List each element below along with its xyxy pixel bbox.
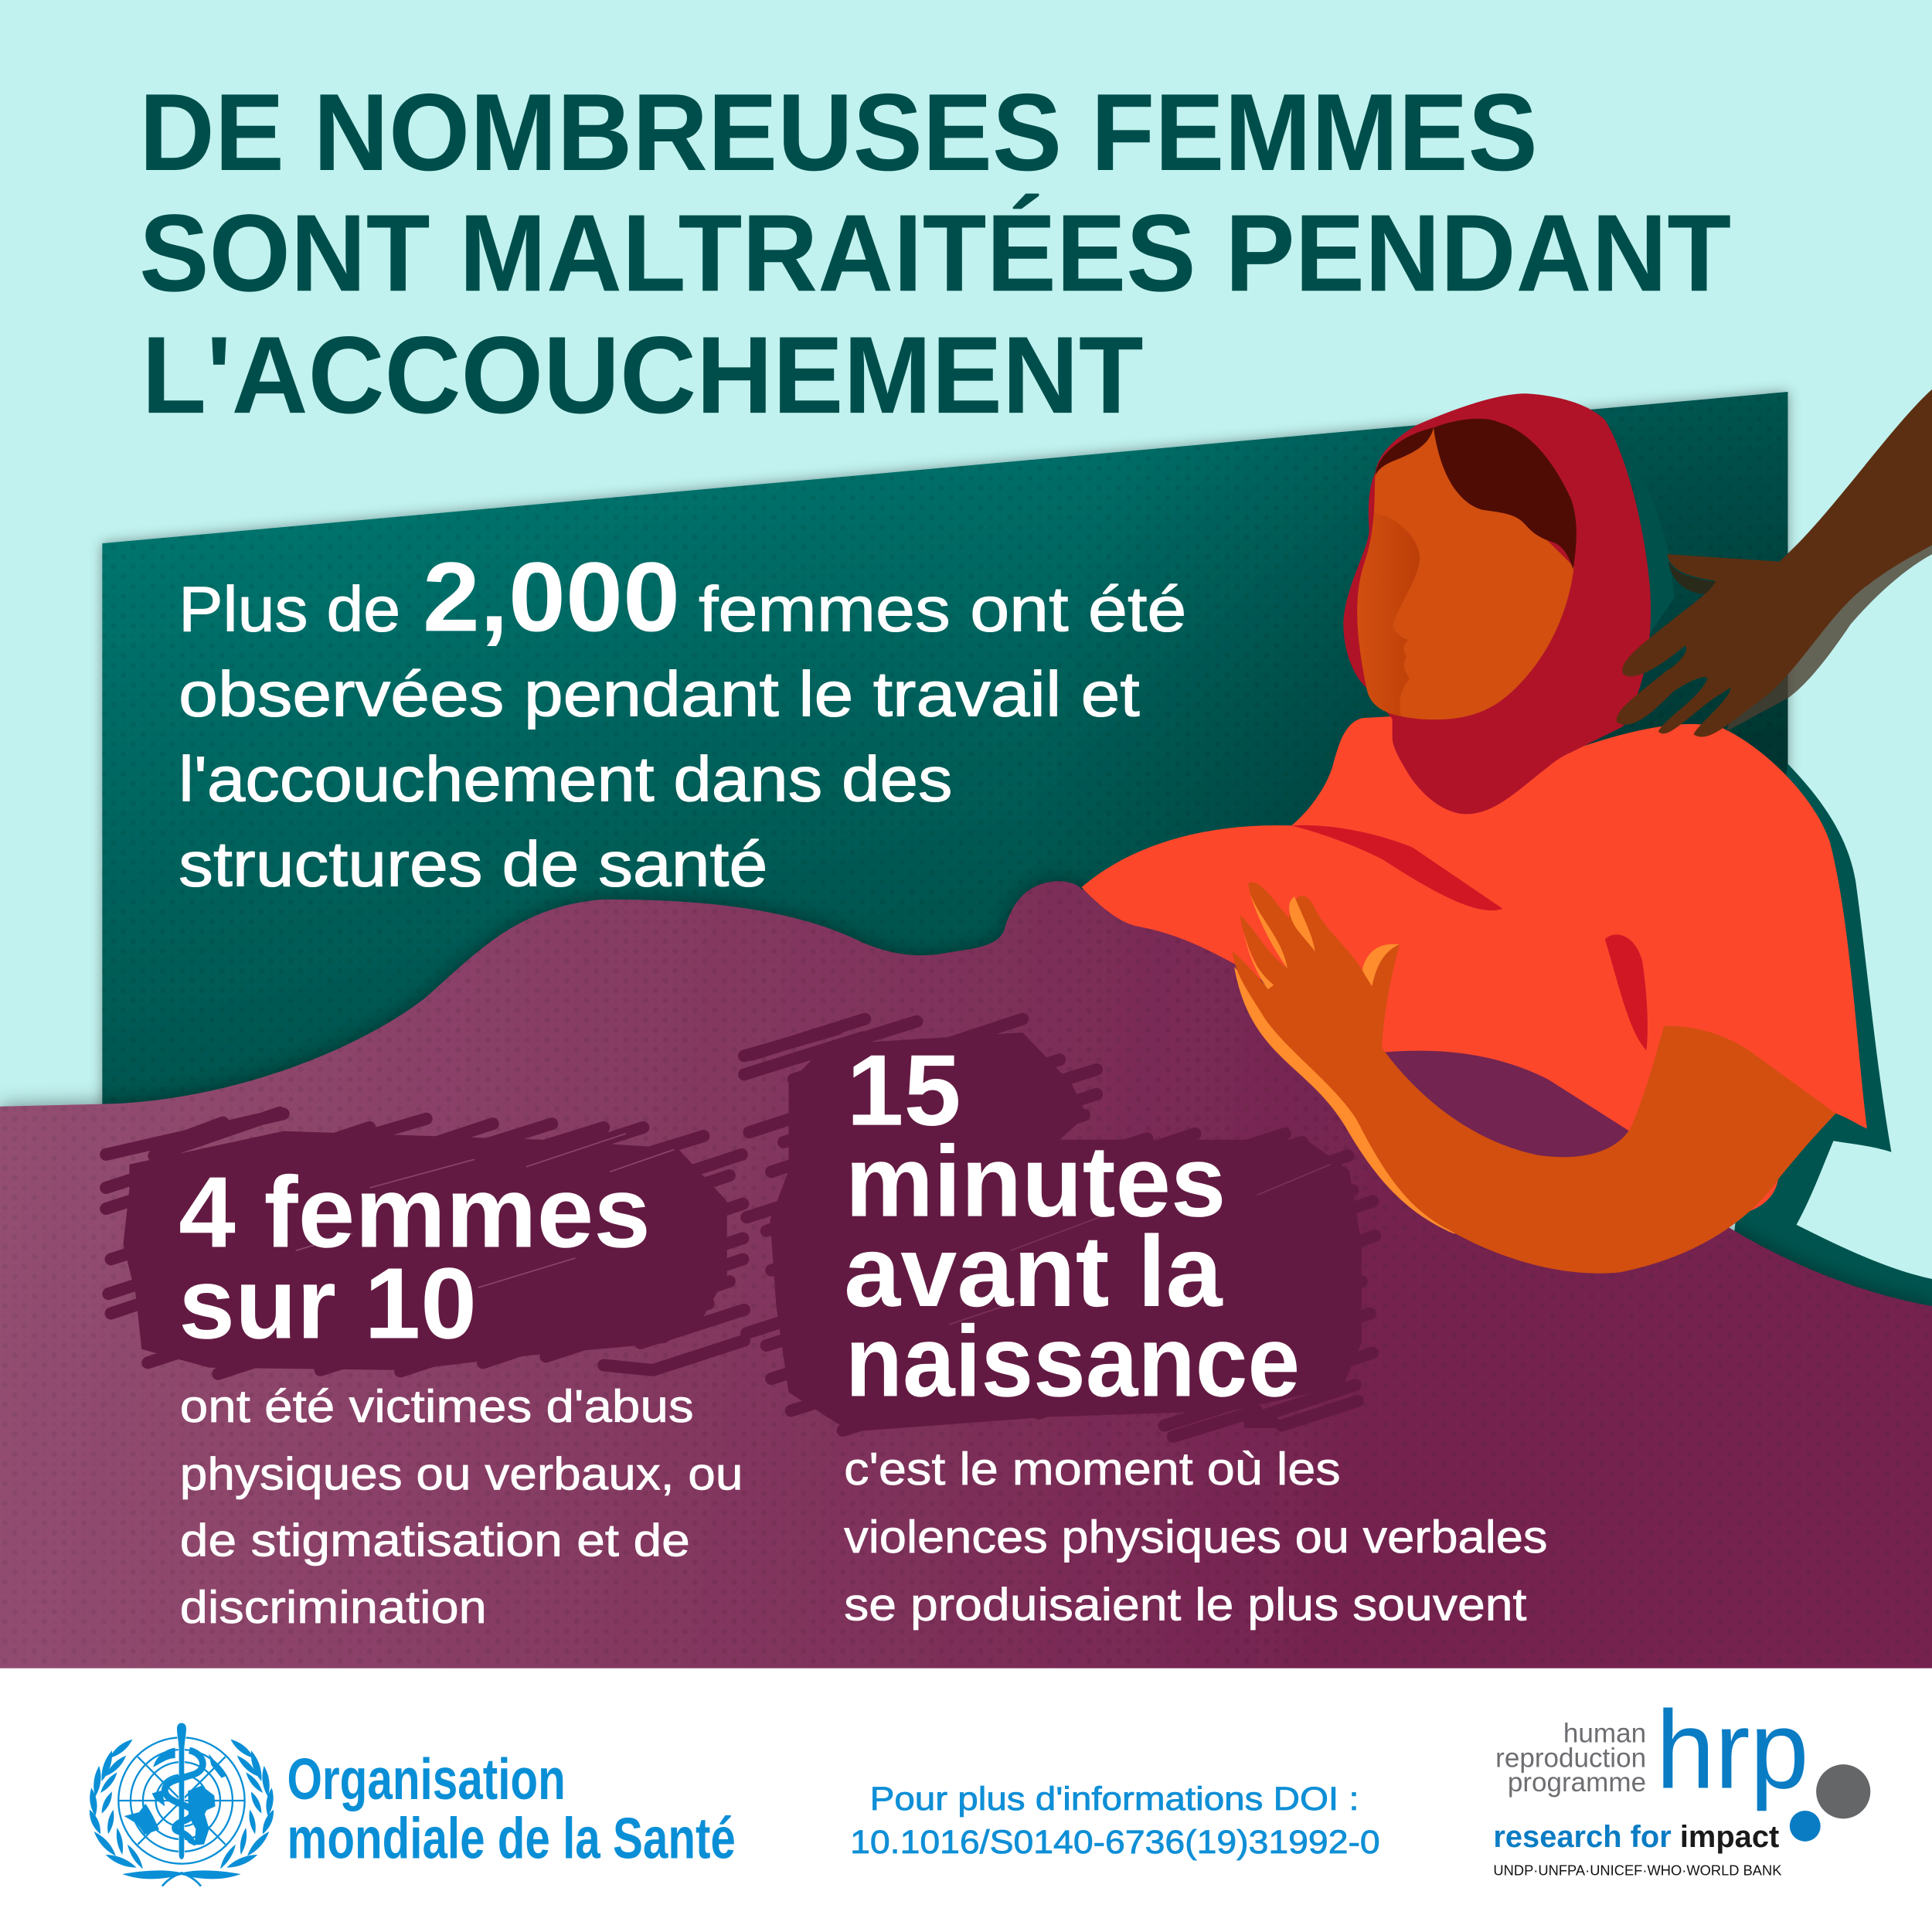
hrp programme name: human xyxy=(1563,1718,1646,1748)
stat: 15 minutes before birth: minutes xyxy=(845,1125,1226,1238)
belly gap xyxy=(1383,1051,1631,1165)
panel: burgundy hill xyxy=(0,881,1932,1668)
research for impact: research for impact xyxy=(1493,1820,1779,1854)
ribbon tails xyxy=(162,1872,201,1886)
text block: 2,000 women observed: l'accouchement dans des xyxy=(179,743,952,815)
shadow band behind the woman xyxy=(1725,764,1932,1318)
hand thumb shadow xyxy=(1668,560,1716,594)
logo text: WHO xyxy=(287,1747,736,1870)
face shading profile xyxy=(1357,512,1420,716)
partners: UNDP·UNFPA·UNICEF·WHO·WORLD BANK xyxy=(1493,1862,1782,1879)
stat: 4 women in 10: sur 10 xyxy=(179,1247,477,1360)
grey dot xyxy=(1816,1764,1870,1818)
logo: WHO emblem xyxy=(90,1723,274,1886)
helping arm shadow xyxy=(1726,542,1932,731)
hrp programme name xyxy=(1495,1718,1646,1798)
finger highlights xyxy=(1244,893,1315,989)
dress fold right xyxy=(1605,934,1648,1050)
logo: HRP xyxy=(1493,1688,1870,1879)
face xyxy=(1357,427,1574,719)
text block: 4 women description: physiques ou verbaux, ou xyxy=(180,1449,743,1500)
arm and hand xyxy=(1233,883,1835,1274)
logo text: WHO: mondiale de la Santé xyxy=(287,1805,736,1870)
text block: 2,000 women observed: structures de santé xyxy=(179,828,767,900)
arm highlight xyxy=(1234,967,1478,1234)
orange dress xyxy=(1082,716,1867,1213)
DOI reference: Pour plus d'informations DOI : xyxy=(870,1781,1359,1818)
text block: 2,000 women observed: femmes ont été xyxy=(699,573,1186,645)
text block: 2,000 women observed xyxy=(179,543,1186,900)
text block: 4 women description: discrimination xyxy=(180,1582,487,1633)
text block: 2,000 women observed: observées pendant le travail et xyxy=(179,658,1140,730)
text block: 15 minutes description: violences physiques ou verbales xyxy=(844,1512,1548,1563)
logo text: WHO: Organisation xyxy=(287,1747,566,1811)
laurel left xyxy=(90,1740,143,1869)
title xyxy=(139,72,1731,437)
dress fold left xyxy=(1291,825,1502,910)
hand xyxy=(1617,389,1932,737)
UN globe rings xyxy=(118,1737,245,1864)
ribbon xyxy=(122,1870,241,1879)
text block: 2,000 women observed: 2,000 xyxy=(423,543,680,652)
title: DE NOMBREUSES FEMMES xyxy=(139,72,1538,194)
snake xyxy=(165,1750,202,1845)
text block: 2,000 women observed: Plus de xyxy=(179,573,400,645)
illustration: head and hood xyxy=(1343,393,1675,814)
footer panel xyxy=(0,1668,1932,1932)
hair xyxy=(1376,419,1577,570)
hrp programme name: reproduction xyxy=(1495,1743,1646,1773)
DOI reference xyxy=(850,1781,1380,1861)
text block: 15 minutes description xyxy=(844,1444,1548,1631)
scribble behind 15 minutes xyxy=(744,1019,1375,1437)
illustration: woman body and arm xyxy=(1082,716,1867,1274)
snake head xyxy=(153,1748,175,1767)
scribble behind 4 femmes xyxy=(106,1113,744,1374)
DOI reference: 10.1016/S0140-6736(19)31992-0 xyxy=(850,1824,1380,1861)
stat: 15 minutes before birth: avant la xyxy=(844,1215,1223,1328)
title: SONT MALTRAITÉES PENDANT xyxy=(139,192,1731,315)
thumb highlight xyxy=(1362,944,1400,986)
hood cast shadow xyxy=(1597,412,1675,634)
hood xyxy=(1343,393,1651,814)
text block: 4 women description: de stigmatisation et de xyxy=(180,1515,690,1566)
continents xyxy=(124,1753,227,1845)
text block: 15 minutes description: se produisaient le plus souvent xyxy=(844,1580,1526,1631)
stat: 4 women in 10 xyxy=(179,1156,651,1360)
hrp letters: hrp xyxy=(1656,1688,1809,1811)
title: L'ACCOUCHEMENT xyxy=(141,315,1144,437)
panel: teal study panel xyxy=(102,392,1787,1109)
laurel right xyxy=(220,1740,274,1869)
stat: 15 minutes before birth: 15 xyxy=(846,1034,961,1147)
staff xyxy=(177,1723,186,1859)
blue dot xyxy=(1790,1811,1821,1842)
text block: 4 women description xyxy=(180,1381,743,1633)
illustration: helping hand xyxy=(1617,389,1932,737)
hrp programme name: programme xyxy=(1508,1767,1646,1798)
text block: 4 women description: ont été victimes d'abus xyxy=(180,1381,694,1432)
stat: 4 women in 10: 4 femmes xyxy=(179,1156,651,1269)
stat: 15 minutes before birth: naissance xyxy=(845,1304,1300,1417)
stat: 15 minutes before birth xyxy=(844,1034,1300,1417)
text block: 15 minutes description: c'est le moment où les xyxy=(844,1444,1341,1495)
